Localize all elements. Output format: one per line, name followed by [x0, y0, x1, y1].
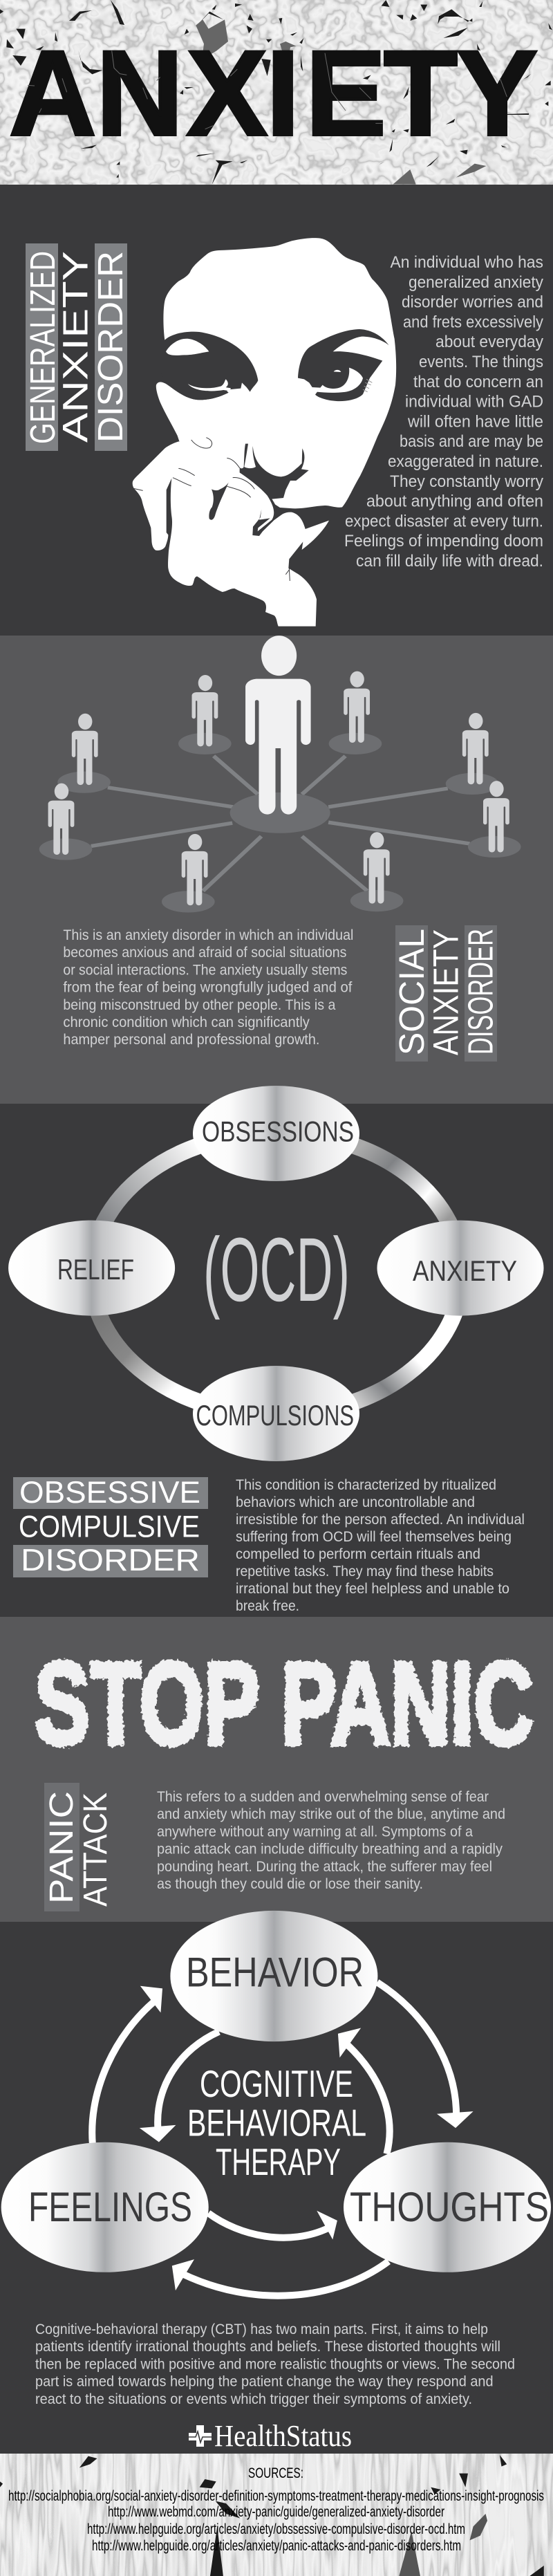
heading: obsessive compulsive disorder: OBSESSIVE [19, 1476, 200, 1510]
body text: social anxiety disorder: being misconstrued by other people. This is a [63, 997, 336, 1013]
body text: social anxiety disorder: or social interactions. The anxiety usually stems [63, 962, 347, 978]
body text: generalized anxiety disorder: that do concern an [413, 373, 543, 391]
title: ANXIETY [9, 26, 538, 161]
panel: generalized anxiety disorder [0, 185, 553, 636]
body text: social anxiety disorder: becomes anxious and afraid of social situations [63, 945, 346, 961]
diagram: CBT cycle arrows [92, 1982, 474, 2296]
body text: obsessive compulsive disorder: suffering from OCD will feel themselves being [236, 1529, 512, 1545]
body text: panic attack: anywhere without any warning at all. Symptoms of a [157, 1824, 473, 1840]
label: cognitive behavioral therapy: BEHAVIORAL [187, 2102, 366, 2144]
node: relief: RELIEF [57, 1253, 134, 1286]
body text: generalized anxiety disorder: can fill daily life with dread. [356, 552, 543, 571]
diagram: OCD cycle [8, 1086, 544, 1461]
node: obsessions [193, 1086, 359, 1181]
body text: obsessive compulsive disorder: irresistible for the person affected. An individual [236, 1512, 525, 1528]
heading: social anxiety disorder: SOCIAL [392, 929, 431, 1055]
body text: social anxiety disorder: chronic condition which can significantly [63, 1014, 310, 1030]
panel: title header [0, 0, 553, 185]
panel: panic attack [0, 1617, 553, 1922]
body text: obsessive compulsive disorder: break free. [236, 1598, 299, 1614]
heading: social anxiety disorder: ANXIETY [426, 929, 466, 1055]
body text: obsessive compulsive disorder: irrational but they feel helpless and unable to [236, 1581, 509, 1597]
body text: obsessive compulsive disorder: behaviors which are uncontrollable and [236, 1494, 475, 1510]
body text: social anxiety disorder: This is an anxiety disorder in which an individual [63, 927, 353, 943]
label: cognitive behavioral therapy: COGNITIVE [200, 2063, 353, 2105]
body text: generalized anxiety disorder: about everyday [435, 333, 543, 351]
logo: HealthStatus: HealthStatus [214, 2419, 352, 2453]
body text: panic attack: as though they could die or lose their sanity. [157, 1876, 423, 1892]
panel: social anxiety disorder [0, 636, 553, 1104]
body text: generalized anxiety disorder: about anything and often [366, 492, 543, 511]
heading: generalized anxiety disorder [23, 243, 130, 451]
body text: cognitive behavioral therapy: Cognitive-behavioral therapy (CBT) has two main parts. First, it aims to help [35, 2322, 488, 2337]
body text: generalized anxiety disorder: and frets excessively [403, 313, 543, 331]
body text: social anxiety disorder: from the fear of being wrongfully judged and of [63, 980, 353, 996]
body text: panic attack: panic attack can include difficulty breathing and a rapidly [157, 1842, 503, 1857]
heading: generalized anxiety disorder: ANXIETY [56, 251, 95, 443]
illustration: anxious face biting hand [133, 238, 396, 627]
node: relief [8, 1221, 175, 1316]
node: anxiety: ANXIETY [413, 1254, 517, 1287]
node: compulsions [193, 1366, 359, 1461]
label: (OCD): (OCD) [203, 1218, 350, 1320]
panel: obsessive compulsive disorder [0, 1086, 553, 1617]
body text: obsessive compulsive disorder: compelled to perform certain rituals and [236, 1546, 480, 1562]
body text: generalized anxiety disorder: will often have little [407, 412, 543, 431]
heading: generalized anxiety disorder: DISORDER [91, 251, 130, 443]
body text: generalized anxiety disorder: events. The things [419, 353, 543, 371]
heading: social anxiety disorder: DISORDER [461, 929, 500, 1055]
body text: cognitive behavioral therapy: patients identify irrational thoughts and beliefs. These distorted thoughts will [35, 2339, 500, 2355]
body text: generalized anxiety disorder: generalized anxiety [409, 273, 543, 292]
heading: panic attack [44, 1783, 114, 1911]
node: compulsions: COMPULSIONS [196, 1399, 354, 1431]
diagram: social network of people [39, 636, 521, 913]
body text: generalized anxiety disorder: They constantly worry [390, 472, 543, 491]
panel: sources footer [0, 2454, 553, 2576]
heading: panic attack: ATTACK [77, 1792, 114, 1907]
node: feelings: FEELINGS [28, 2184, 192, 2230]
node: behavior [170, 1911, 377, 2041]
body text: cognitive behavioral therapy: then be replaced with positive and more realistic thoughts or views. The second [35, 2356, 515, 2372]
body text: obsessive compulsive disorder: repetitive tasks. They may find these habits [236, 1564, 494, 1579]
node: feelings [1, 2142, 209, 2272]
node: thoughts [344, 2142, 551, 2272]
label: cognitive behavioral therapy: THERAPY [216, 2141, 341, 2183]
body text: generalized anxiety disorder: disorder worries and [402, 293, 543, 312]
heading: panic attack: PANIC [44, 1791, 80, 1904]
body text: generalized anxiety disorder [344, 253, 543, 571]
sources list [8, 2465, 544, 2554]
heading: obsessive compulsive disorder: DISORDER [21, 1544, 200, 1577]
heading: social anxiety disorder [392, 925, 500, 1062]
node: anxiety [377, 1221, 543, 1316]
sources list: SOURCES: [248, 2465, 303, 2481]
body text: panic attack: and anxiety which may strike out of the blue, anytime and [157, 1806, 505, 1822]
label: cognitive behavioral therapy [187, 2063, 366, 2183]
body text: social anxiety disorder: hamper personal and professional growth. [63, 1032, 319, 1048]
body text: generalized anxiety disorder: individual with GAD [405, 393, 543, 411]
body text: generalized anxiety disorder: An individual who has [390, 253, 543, 272]
body text: cognitive behavioral therapy: part is aimed towards helping the patient change the way they respond and [35, 2374, 494, 2390]
body text: panic attack: This refers to a sudden and overwhelming sense of fear [157, 1789, 489, 1805]
body text: panic attack [157, 1789, 505, 1892]
body text: generalized anxiety disorder: expect disaster at every turn. [345, 512, 543, 530]
body text: obsessive compulsive disorder [236, 1477, 525, 1614]
body text: social anxiety disorder [63, 927, 353, 1048]
heading: generalized anxiety disorder: GENERALIZED [23, 251, 62, 444]
panel: cognitive behavioral therapy [0, 1911, 553, 2454]
heading: obsessive compulsive disorder [13, 1476, 208, 1577]
body text: cognitive behavioral therapy [35, 2322, 515, 2407]
body text: obsessive compulsive disorder: This condition is characterized by ritualized [236, 1477, 496, 1493]
body text: generalized anxiety disorder: exaggerated in nature. [388, 452, 543, 471]
node: behavior: BEHAVIOR [186, 1949, 364, 1996]
node: obsessions: OBSESSIONS [202, 1115, 354, 1148]
body text: generalized anxiety disorder: Feelings of impending doom [344, 532, 543, 550]
body text: cognitive behavioral therapy: react to the situations or events which trigger their symptoms of anxiety. [35, 2391, 472, 2407]
heading: obsessive compulsive disorder: COMPULSIVE [19, 1510, 200, 1544]
body text: panic attack: pounding heart. During the attack, the sufferer may feel [157, 1859, 492, 1875]
